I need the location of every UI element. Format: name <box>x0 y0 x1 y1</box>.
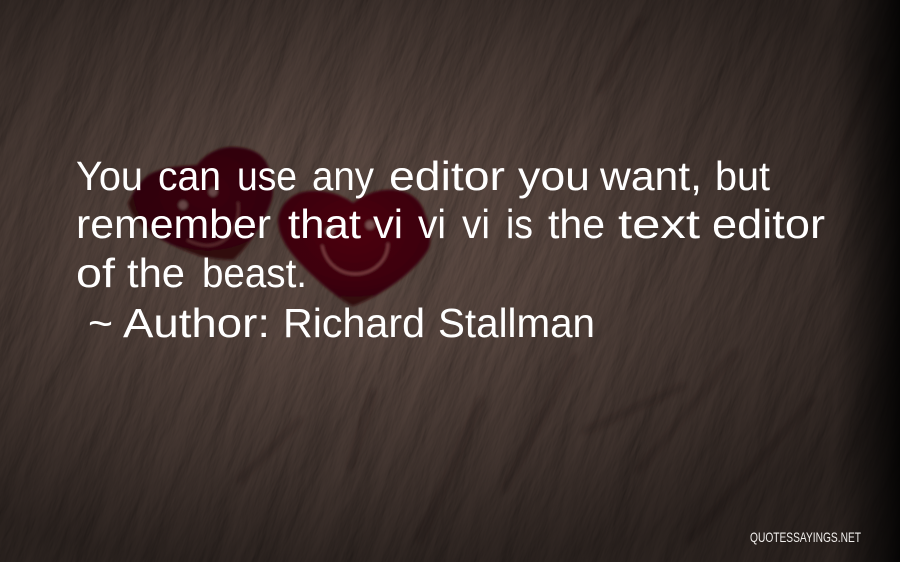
background <box>240 20 880 540</box>
quote line 2: editor <box>712 201 825 247</box>
author line: Author: <box>123 300 270 346</box>
quote text <box>76 153 825 296</box>
quote line 3 <box>76 250 307 296</box>
quote line 1 <box>76 153 771 199</box>
quote line 2: the <box>548 201 605 247</box>
author line: Stallman <box>438 300 595 346</box>
author line <box>88 300 595 346</box>
quote line 3: the <box>127 250 185 296</box>
quote line 3: of <box>76 250 116 296</box>
watermark: QUOTESSAYINGS.NET <box>750 529 861 545</box>
quote line 2: is <box>506 201 533 247</box>
quote line 2: text <box>618 201 701 247</box>
author line: Richard <box>283 300 425 346</box>
author line: ~ <box>88 300 113 346</box>
quote line 2: remember <box>76 201 271 247</box>
quote line 1: You <box>76 153 143 199</box>
quote line 1: any <box>312 153 374 199</box>
quote line 2: vi <box>462 201 490 247</box>
quote line 2 <box>76 201 825 247</box>
icon: right heart <box>278 190 430 306</box>
quote line 1: you <box>518 153 590 199</box>
quote line 1: use <box>237 153 297 199</box>
icon: left heart <box>128 147 273 260</box>
quote line 2: that <box>288 201 362 247</box>
quote line 2: vi <box>418 201 446 247</box>
quote line 1: want, <box>599 153 702 199</box>
quote line 2: vi <box>373 201 403 247</box>
quote line 1: editor <box>389 153 505 199</box>
right edge shadow <box>835 0 900 562</box>
quote line 1: but <box>715 153 771 199</box>
quote line 3: beast. <box>202 250 307 296</box>
quote line 1: can <box>158 153 221 199</box>
